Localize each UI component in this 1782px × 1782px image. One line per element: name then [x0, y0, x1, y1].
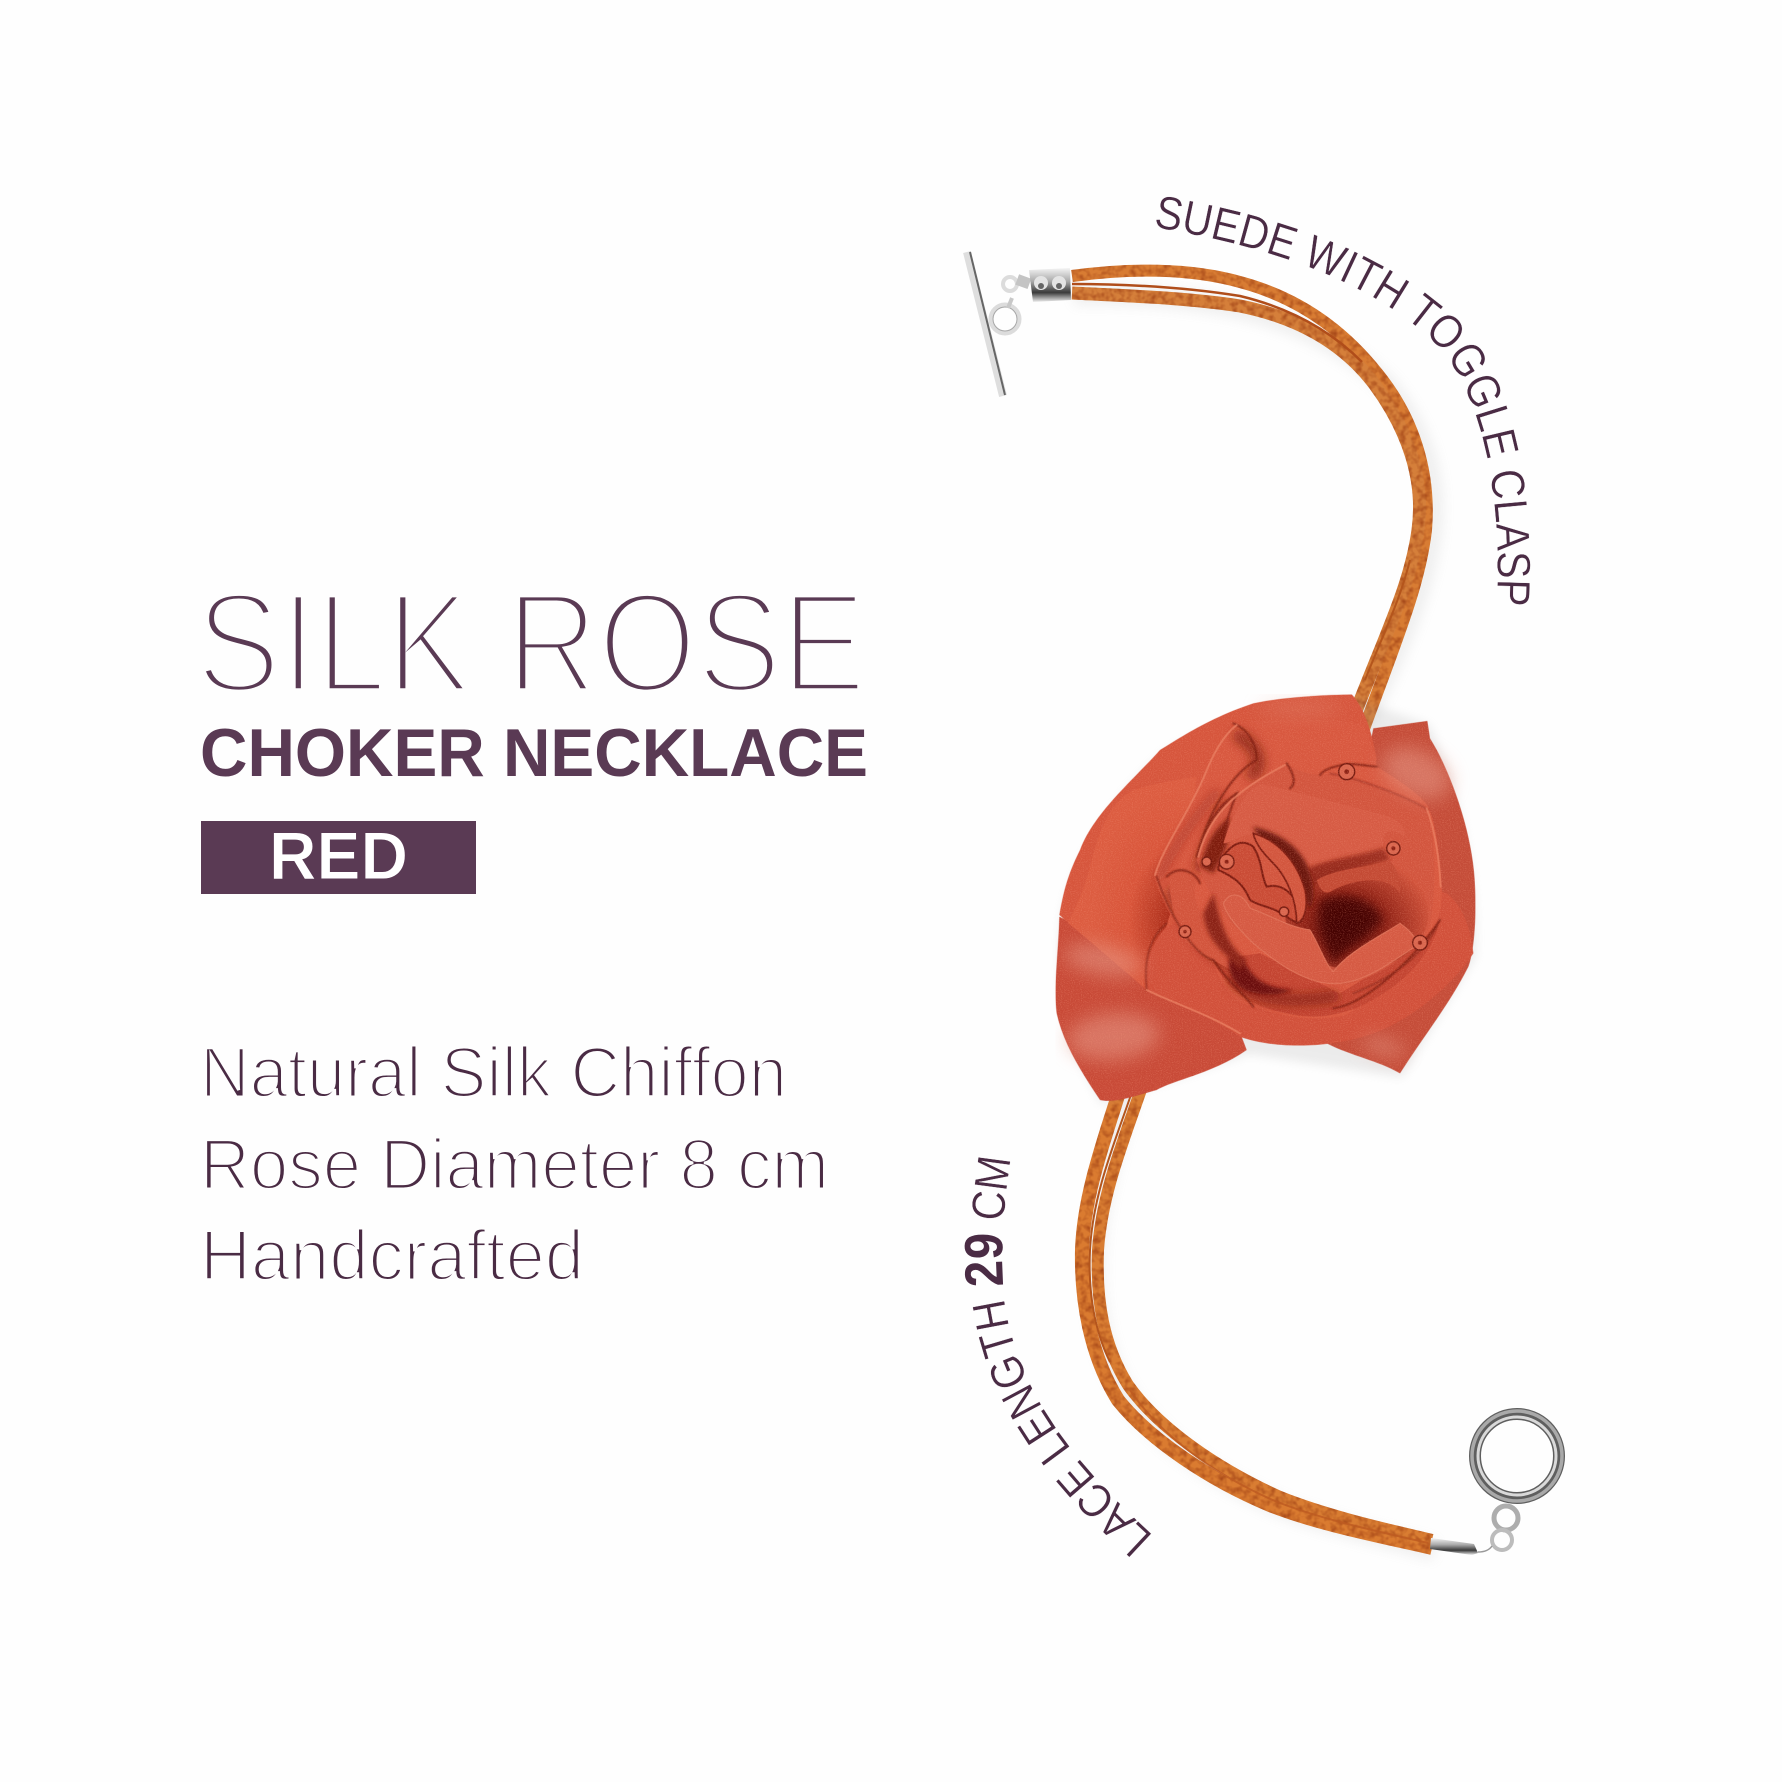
bottom ruffle: [1223, 895, 1420, 984]
necklace: lower suede cord: [1082, 1070, 1435, 1551]
shadow under centre petal lip: [1307, 848, 1390, 887]
dark fold centre: [1253, 827, 1314, 910]
main rim petal: [1154, 719, 1442, 1018]
lower collar petal: [1146, 860, 1473, 1045]
title: SILK ROSE: SILK ROSE: [196, 564, 866, 723]
crisp fold lines: [1146, 723, 1440, 1008]
right inner petal: [1317, 860, 1400, 893]
left petal: [1068, 777, 1197, 990]
centre right strand: [1253, 833, 1306, 923]
back right petal: [1327, 721, 1475, 1073]
ring clasp: large ring, small rings and end cap: [1430, 1411, 1562, 1555]
curved label: suede with toggle clasp: SUEDE WITH TOGGLE CLASP: [1156, 196, 1530, 604]
silk sheen highlights: [1061, 702, 1460, 1064]
curled petal edges: [1179, 764, 1427, 950]
top outer petal: [1059, 694, 1377, 990]
centre top petal: [1223, 784, 1405, 867]
product details text block: Natural Silk Chiffon: [200, 1034, 787, 1113]
ruffle under rim: [1213, 920, 1440, 1017]
colour badge: RED: RED: [269, 818, 408, 894]
dark core shadow: [1319, 896, 1383, 967]
rim fold shadows: [1160, 737, 1333, 1000]
necklace: upper suede cord: [1072, 271, 1433, 740]
centre swirl strands: [1218, 843, 1303, 922]
gap shadows: [1229, 957, 1293, 995]
deep bowl right: [1285, 857, 1428, 970]
lit petal edges: [1147, 725, 1441, 1033]
inner ring petal: [1197, 763, 1434, 985]
product details text block: [200, 1034, 829, 1296]
colour badge: RED: [201, 818, 476, 894]
curved label: lace length 29 cm: LACE LENGTH 29 CM: [964, 1157, 1152, 1557]
product details text block: Rose Diameter 8 cm: [200, 1126, 829, 1205]
subtitle: CHOKER NECKLACE: CHOKER NECKLACE: [200, 715, 868, 791]
product details text block: Handcrafted: [200, 1217, 584, 1296]
back left petal: [1056, 917, 1247, 1101]
petals group with fabric grain: [1056, 694, 1475, 1101]
left inner fold: [1169, 868, 1240, 973]
flower soft shadow: [1060, 698, 1476, 1104]
toggle clasp: T-bar, rings and end cap: [967, 252, 1071, 396]
rose flower: [1056, 694, 1476, 1104]
